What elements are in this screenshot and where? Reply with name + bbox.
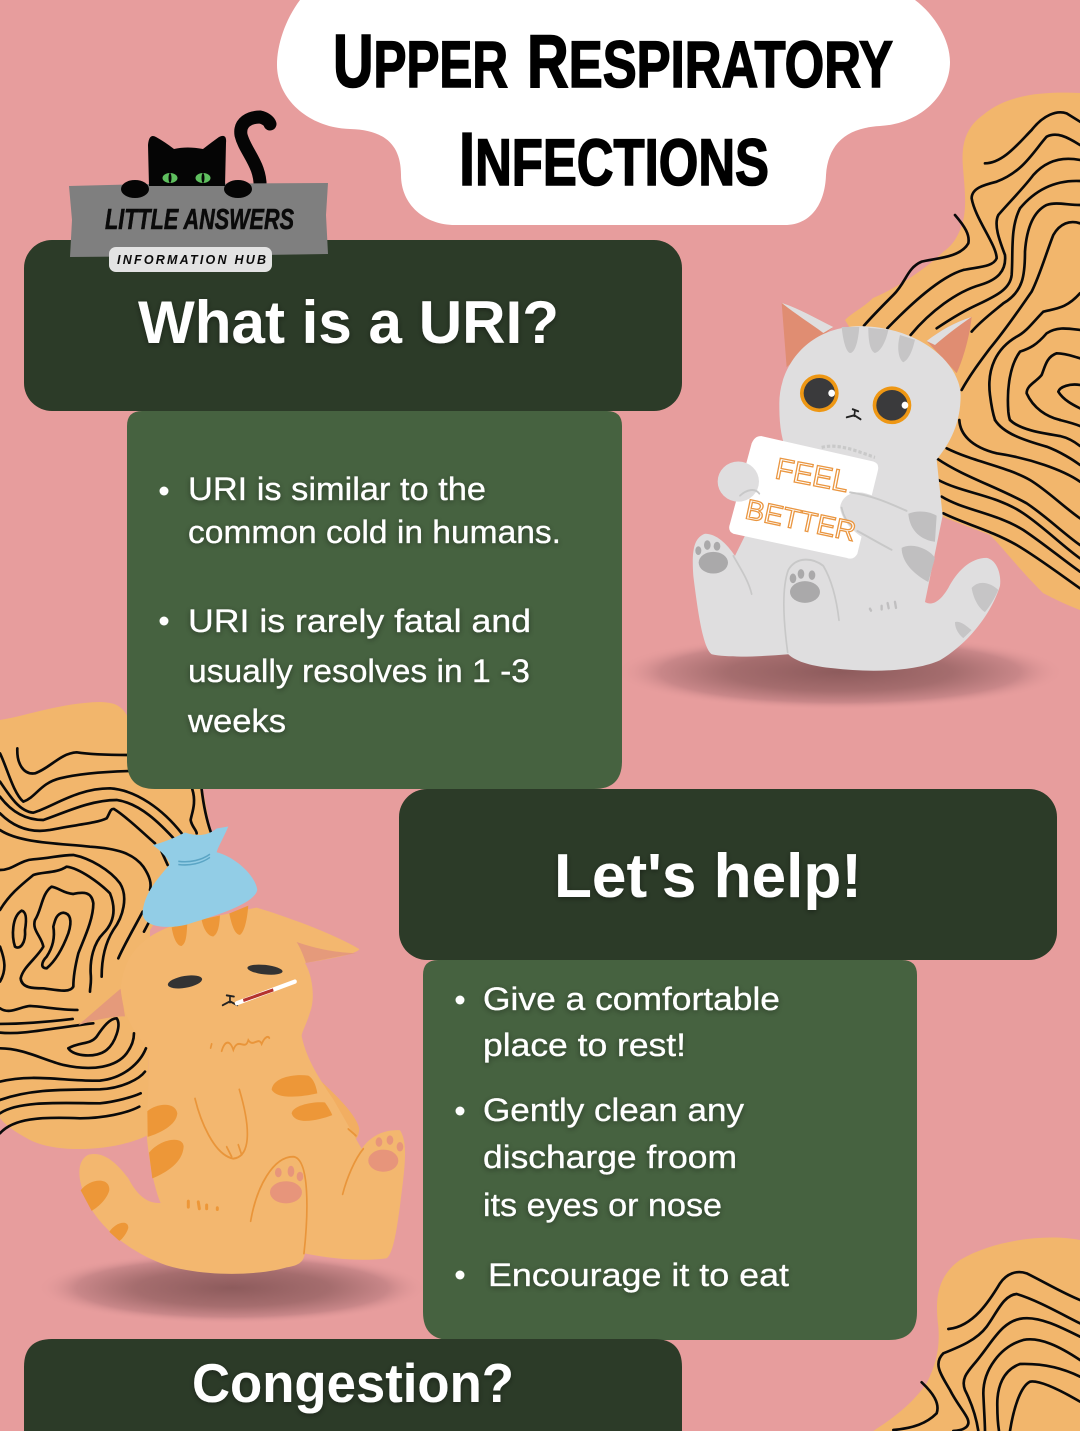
title text: INFECTIONS xyxy=(459,117,769,201)
logo tagline pill xyxy=(109,247,272,272)
panel: what is a URI body xyxy=(127,411,622,789)
panel: let's help body xyxy=(423,960,917,1340)
logo black cat xyxy=(121,136,252,198)
decorative blob: upper right contour xyxy=(845,93,1080,610)
bullet list: what is a URI: common cold in humans. xyxy=(188,514,561,550)
panel: let's help heading xyxy=(399,789,1057,960)
bullet list: what is a URI: usually resolves in 1 -3 xyxy=(188,653,530,689)
bullet list: let's help: its eyes or nose xyxy=(483,1187,722,1223)
sign text: better: BETTER xyxy=(743,494,859,547)
bullet list: what is a URI xyxy=(160,471,561,739)
title text xyxy=(333,19,893,201)
title text: RESPIRATORY xyxy=(527,19,893,103)
bullet list: what is a URI: URI is rarely fatal and xyxy=(188,603,531,639)
bullet list: what is a URI: weeks xyxy=(187,703,286,739)
logo wordmark: LITTLE ANSWERS xyxy=(105,204,294,236)
bullet list: let's help: Gently clean any xyxy=(483,1092,745,1128)
bullet list: let's help: Encourage it to eat xyxy=(488,1257,789,1293)
panel: congestion heading xyxy=(24,1339,682,1431)
panel: what is a URI heading xyxy=(24,240,682,411)
title text: UPPER xyxy=(333,19,508,103)
panel: congestion heading: Congestion? xyxy=(192,1352,514,1414)
panel: let's help heading: Let's help! xyxy=(554,842,862,911)
title banner xyxy=(277,0,950,225)
bullet list: let's help xyxy=(456,981,789,1293)
bullet list: let's help: discharge froom xyxy=(483,1139,737,1175)
bullet list: what is a URI: URI is similar to the xyxy=(188,471,486,507)
sign text: feel: FEEL xyxy=(773,452,852,499)
illustration: gray cat holding feel better sign xyxy=(615,303,1065,710)
logo cat tail xyxy=(241,117,270,190)
decorative blob: lower right contour xyxy=(873,1237,1080,1431)
decorative blob: left contour xyxy=(0,702,211,1149)
panel: what is a URI heading: What is a URI? xyxy=(138,289,559,356)
logo sign board xyxy=(69,183,328,257)
logo: little answers information hub xyxy=(69,117,328,272)
logo tagline pill: INFORMATION HUB xyxy=(117,253,266,267)
bullet list: let's help: place to rest! xyxy=(483,1027,686,1063)
illustration: orange cat with ice pack and thermometer xyxy=(37,827,427,1324)
bullet list: let's help: Give a comfortable xyxy=(483,981,780,1017)
